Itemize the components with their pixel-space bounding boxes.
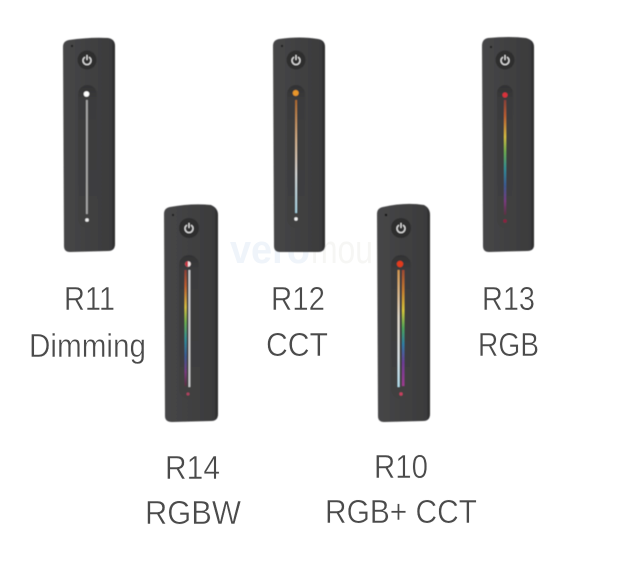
watermark: mou bbox=[311, 228, 373, 272]
remote R14 RGBW bbox=[164, 204, 218, 422]
remote R12 CCT bbox=[273, 38, 325, 252]
label: R11 Dimming bbox=[29, 280, 146, 364]
label: R10 RGB+ CCT bbox=[325, 448, 477, 530]
icon: power button bbox=[391, 218, 411, 238]
watermark: vero bbox=[230, 228, 310, 272]
label: R12 CCT bbox=[266, 280, 328, 363]
remote R13 RGB bbox=[482, 37, 534, 252]
remote R10 RGB+CCT bbox=[377, 204, 430, 422]
label: R13 RGB: R13 bbox=[482, 280, 535, 317]
label: R14 RGBW: R14 bbox=[165, 449, 220, 486]
remote R11 dimming bbox=[63, 38, 115, 252]
label: R10 RGB+ CCT: R10 bbox=[374, 448, 428, 485]
label: R10 RGB+ CCT: RGB+ CCT bbox=[325, 493, 477, 530]
label: R12 CCT: R12 bbox=[271, 280, 325, 317]
label: R14 RGBW: RGBW bbox=[145, 494, 242, 531]
label: R13 RGB: RGB bbox=[478, 326, 539, 363]
label: R12 CCT: CCT bbox=[266, 326, 328, 363]
label: R14 RGBW bbox=[145, 449, 242, 531]
label: R11 Dimming: R11 bbox=[64, 280, 115, 317]
watermark bbox=[230, 228, 373, 272]
label: R11 Dimming: Dimming bbox=[29, 327, 146, 364]
icon: power button bbox=[496, 50, 514, 70]
icon: power button bbox=[286, 50, 306, 70]
icon: power button bbox=[78, 50, 96, 70]
label: R13 RGB bbox=[478, 280, 539, 363]
icon: power button bbox=[179, 218, 199, 238]
